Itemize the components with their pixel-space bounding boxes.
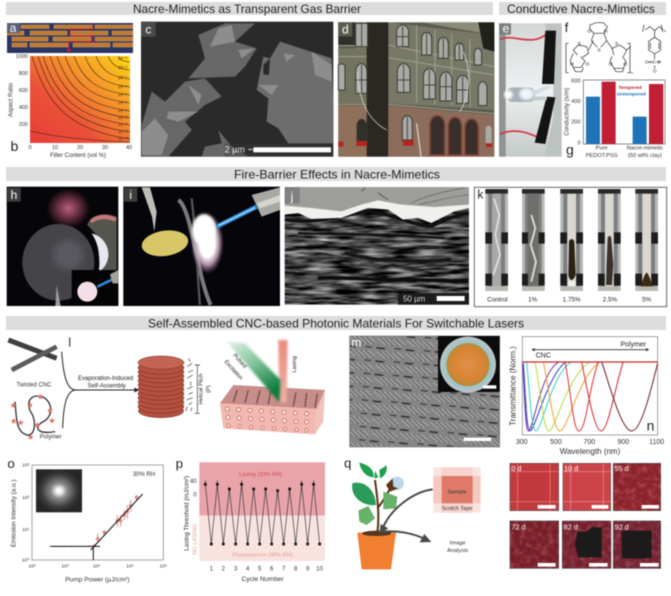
photo 55 d [613,463,661,511]
helical pitch marker: (P) [206,385,212,393]
scale bar [224,143,333,157]
panel p: lasing threshold cycling chart: p [176,456,183,471]
polymer with stars: Polymer [40,435,62,441]
contour labels: 10⁻⁵ [118,75,127,80]
panel f: polymer chemical structures: f [565,20,569,35]
photo 0 d [510,463,559,511]
direction arrow: CNC [536,352,551,359]
axis labels: Aspect Ratio [8,82,14,117]
threshold fit lines [50,494,143,560]
axis labels: 6 [270,567,274,573]
panel p: lasing threshold cycling chart: Lasing (33% RH) [239,472,282,478]
PEDOT atom labels: O [604,28,608,34]
contour labels: 10⁻¹⁰ [118,115,129,120]
panel h: torch on nacre-mimetic sheet photo: h [11,188,17,202]
photo 72 d [510,521,559,568]
black tape [542,31,556,84]
axis labels: 7 [282,567,286,573]
panel b: aspect ratio heat map [8,54,132,159]
axis labels: 10¹ [22,527,30,533]
arrows [381,489,433,539]
axis labels: 1100 [649,439,664,446]
panel e: LED circuit photo: e [503,22,510,36]
panel i: cocoon protected from torch photo: i [129,188,132,202]
PEDOT atom labels: n [631,70,633,75]
axis labels: Filler Content (vol %) [50,153,106,159]
photo 0 d: 0 d [511,464,522,473]
PEDOT atom labels: O [587,28,591,34]
window bars [356,23,469,140]
PSS atom labels [645,28,666,74]
panel c: electron micrograph of clay flakes [141,22,333,157]
photonic block with beams: Lasing [292,356,298,373]
panel p: lasing threshold cycling chart: NO LASING [193,524,199,555]
PEDOT atom labels: O [609,61,613,67]
tape sample [433,467,481,513]
contour labels: 10⁻⁶ [118,84,127,89]
panel g: conductivity bar chart: Tempered [618,85,642,91]
panel: sample degradation photos [510,463,661,568]
panel g: conductivity bar chart: Untempered [617,92,646,98]
panel l: self-assembly schematic: l [68,336,71,350]
specimen labels: 1% [528,296,538,303]
photo 10 d: 10 d [564,464,578,473]
panel q: potted plant sample schematic [344,455,481,569]
axis labels: 3 [234,567,238,573]
axis labels: 0 [193,492,197,498]
axis labels: 800 [19,71,28,77]
contour labels [118,56,129,141]
inset: coloured film [438,336,500,393]
plant [352,463,404,533]
panel c: electron micrograph of clay flakes: c [145,23,151,37]
axis labels: Pump Power (µJ/cm²) [65,576,130,583]
axis labels: 8 [294,567,298,573]
axis labels: Lasing Threshold (mJ/cm²) [183,476,190,551]
scale bar: 50 µm [403,294,426,303]
image analysis label: Image [450,541,466,547]
tape sample: Scotch Tape [441,506,473,512]
panel n: transmittance spectra chart [508,337,664,456]
panel m: helical cross-section micrograph with inset film: m [351,336,361,350]
axis labels: Transmittance (Norm.) [508,346,517,426]
helical stack [138,356,184,418]
twisted CNC rods: Twisted CNC [17,382,52,388]
LED [507,87,535,102]
axis labels: 500 [550,439,562,446]
contour labels: 10⁻⁷ [118,92,127,97]
panel n: transmittance spectra chart: n [647,417,654,433]
axis labels: 400 [19,105,28,111]
photonic block with beams: Pulsed [231,353,247,370]
contour labels: 10⁻¹¹ [118,122,129,127]
axis labels: 900 [617,439,629,446]
panel o: emission intensity chart: 30% RH [133,472,155,478]
panel h: torch on nacre-mimetic sheet photo [7,187,118,306]
axis labels: 10 [316,567,324,573]
layered film body [285,206,469,305]
axis labels: PEDOT:PSS [586,153,618,159]
PSS atom labels: x [664,28,666,33]
heading: Self-Assembled CNC-based Photonic Materials For Switchable Lasers [6,316,666,330]
specimen labels: Control [487,296,508,303]
flower boxes [338,140,492,147]
helical pitch marker: Helical Pitch [199,373,205,405]
axis labels: Cycle Number [242,576,285,583]
axis labels: 10⁴ [93,563,101,569]
polymer with stars [10,394,62,441]
PEDOT atom labels: S [615,41,619,47]
panel k: burn test specimens: k [477,187,484,201]
photo 72 d: 72 d [511,522,526,531]
axis labels: 30 [102,145,108,151]
panel p: lasing threshold cycling chart [176,456,325,583]
panel g: conductivity bar chart: g [566,142,574,158]
heading: Nacre-Mimetics as Transparent Gas Barrier [6,2,493,16]
axis labels: 400 [571,99,581,105]
axis labels [565,79,663,159]
panel d: photo of building seen through film [338,22,494,157]
panel o: emission intensity chart [7,456,167,583]
axis labels: 20 [77,145,83,151]
axis labels: Pure [596,145,608,151]
contour labels: 10⁻⁸ [118,100,127,105]
axis labels: Nacre-mimetic [627,145,663,151]
specimen: 1.75% [560,189,583,291]
axis labels [11,463,167,583]
heading: Nacre-Mimetics as Transparent Gas Barrier: Nacre-Mimetics as Transparent Gas Barrier [133,2,361,16]
photonic block with beams [220,340,325,434]
photo 55 d: 55 d [614,464,629,473]
contour labels: 10⁻³ [118,56,127,61]
panel l: self-assembly schematic [8,336,325,441]
scale bar: 2 µm [225,145,245,155]
spectral dips [523,362,658,431]
axis labels: Conductivity (s/m) [565,88,571,136]
heading: Fire-Barrier Effects in Nacre-Mimetics: Fire-Barrier Effects in Nacre-Mimetics [234,168,440,182]
panel p: lasing threshold cycling chart: Fluorescence (98% RH) [232,552,293,558]
axis labels [183,476,324,583]
axis labels: 200 [571,120,581,126]
direction arrow [531,341,649,359]
inset: lasing spot [36,469,82,512]
axis labels: 1000 [16,54,28,60]
panel k: burn test specimens [474,187,667,307]
axis labels: 4 [246,567,250,573]
specimen labels: 1.75% [563,296,581,303]
specimen labels [487,296,652,303]
process arrow: Self-Assembly [88,384,126,390]
axis labels: 10² [28,563,36,569]
PSS atom labels: O=S=O [645,60,661,65]
wires [500,35,546,137]
specimen: 2.5% [598,189,621,291]
axis labels: Wavelength (nm) [560,447,621,456]
axis labels: 2 [222,567,226,573]
axis labels: 600 [571,79,581,85]
photo 82 d: 82 d [564,522,578,531]
panel a: brick and mortar schematic: a [10,21,17,35]
process arrow: Evaporation-Induced [78,376,133,382]
panel b: aspect ratio heat map: b [10,138,18,154]
image analysis label: Analysis [447,548,468,554]
PEDOT atom labels: O [585,61,589,67]
photo 82 d [562,521,611,568]
inset: burning sample [72,270,118,306]
PSS structure [643,25,663,69]
contour labels: 10⁻¹³ [118,136,129,141]
PEDOT atom labels [570,28,633,75]
specimen: control [485,189,508,291]
process arrow [62,352,140,428]
PEDOT atom labels: S [578,41,582,47]
axis labels: (50 wt% clay) [628,153,662,159]
contour labels: 10⁻⁹ [118,108,127,113]
tape sample: Sample [447,490,467,496]
panel a: brick and mortar schematic [7,21,133,53]
axis labels: 0 [578,141,581,147]
PSS atom labels: O [653,69,657,74]
photo 92 d [613,521,661,568]
image analysis label [447,541,468,554]
axis labels: 40 [126,145,132,151]
heading: Conductive Nacre-Mimetics: Conductive Nacre-Mimetics [507,2,655,16]
axis labels: 10⁶ [160,563,167,569]
PEDOT atom labels: S [597,47,601,53]
axis labels: 10³ [22,463,30,469]
axis labels: 300 [516,439,528,446]
axis labels: 700 [583,439,595,446]
contour labels: 10⁻¹² [118,129,129,134]
axis labels: 10² [22,495,30,501]
zigzag data [204,481,321,545]
axis labels: 200 [19,122,28,128]
photo 10 d [563,463,611,511]
panel j: cross-section micrograph [285,187,469,305]
PEDOT structure [566,23,631,73]
scale bar [398,293,469,305]
axis labels: 9 [306,567,310,573]
axis labels: 10 [52,145,58,151]
panel f: polymer chemical structures [565,20,666,75]
panel i: cocoon protected from torch photo [123,187,280,306]
arched doors [430,116,478,155]
specimen: 5% [635,189,658,291]
axis labels: 0 [28,145,32,151]
heading: Fire-Barrier Effects in Nacre-Mimetics [6,167,666,182]
heading: Self-Assembled CNC-based Photonic Materials For Switchable Lasers: Self-Assembled CNC-based Photonic Materials For Switchable Lasers [148,316,524,330]
photo 92 d: 92 d [615,522,629,531]
PEDOT atom labels: O [623,61,627,67]
axis labels: 10⁵ [126,563,134,569]
specimen labels: 2.5% [603,296,618,303]
axis labels: 600 [19,88,28,94]
flower pot [357,531,396,569]
contour lines [30,56,130,142]
twisted CNC rods [8,340,57,388]
axis labels: 5 [258,567,262,573]
direction arrow: Polymer [621,341,647,348]
panel m: helical cross-section micrograph with inset film [350,336,500,447]
contour labels: 10⁻⁴ [118,65,127,70]
panel e: LED circuit photo [499,22,562,157]
specimen labels: 5% [642,296,652,303]
panel d: photo of building seen through film: d [342,22,349,36]
panel j: cross-section micrograph: j [290,189,293,203]
axis labels [8,54,132,159]
windows [338,23,487,140]
axis labels: 40 [190,479,197,485]
axis labels: Emission Intensity (a.u.) [11,480,18,547]
panel q: potted plant sample schematic: q [344,455,351,470]
panel o: emission intensity chart: o [7,456,15,471]
photonic block with beams: Excitation [223,359,243,381]
axis labels [508,346,664,456]
axis labels: 10⁰ [22,558,29,564]
axis labels: 10³ [61,563,69,569]
PEDOT atom labels: O [570,61,574,67]
specimen: 1% [522,189,545,291]
data points [53,495,138,547]
axis labels: 1 [210,567,214,573]
panel g: conductivity bar chart [565,79,665,159]
helical pitch marker [186,358,212,413]
